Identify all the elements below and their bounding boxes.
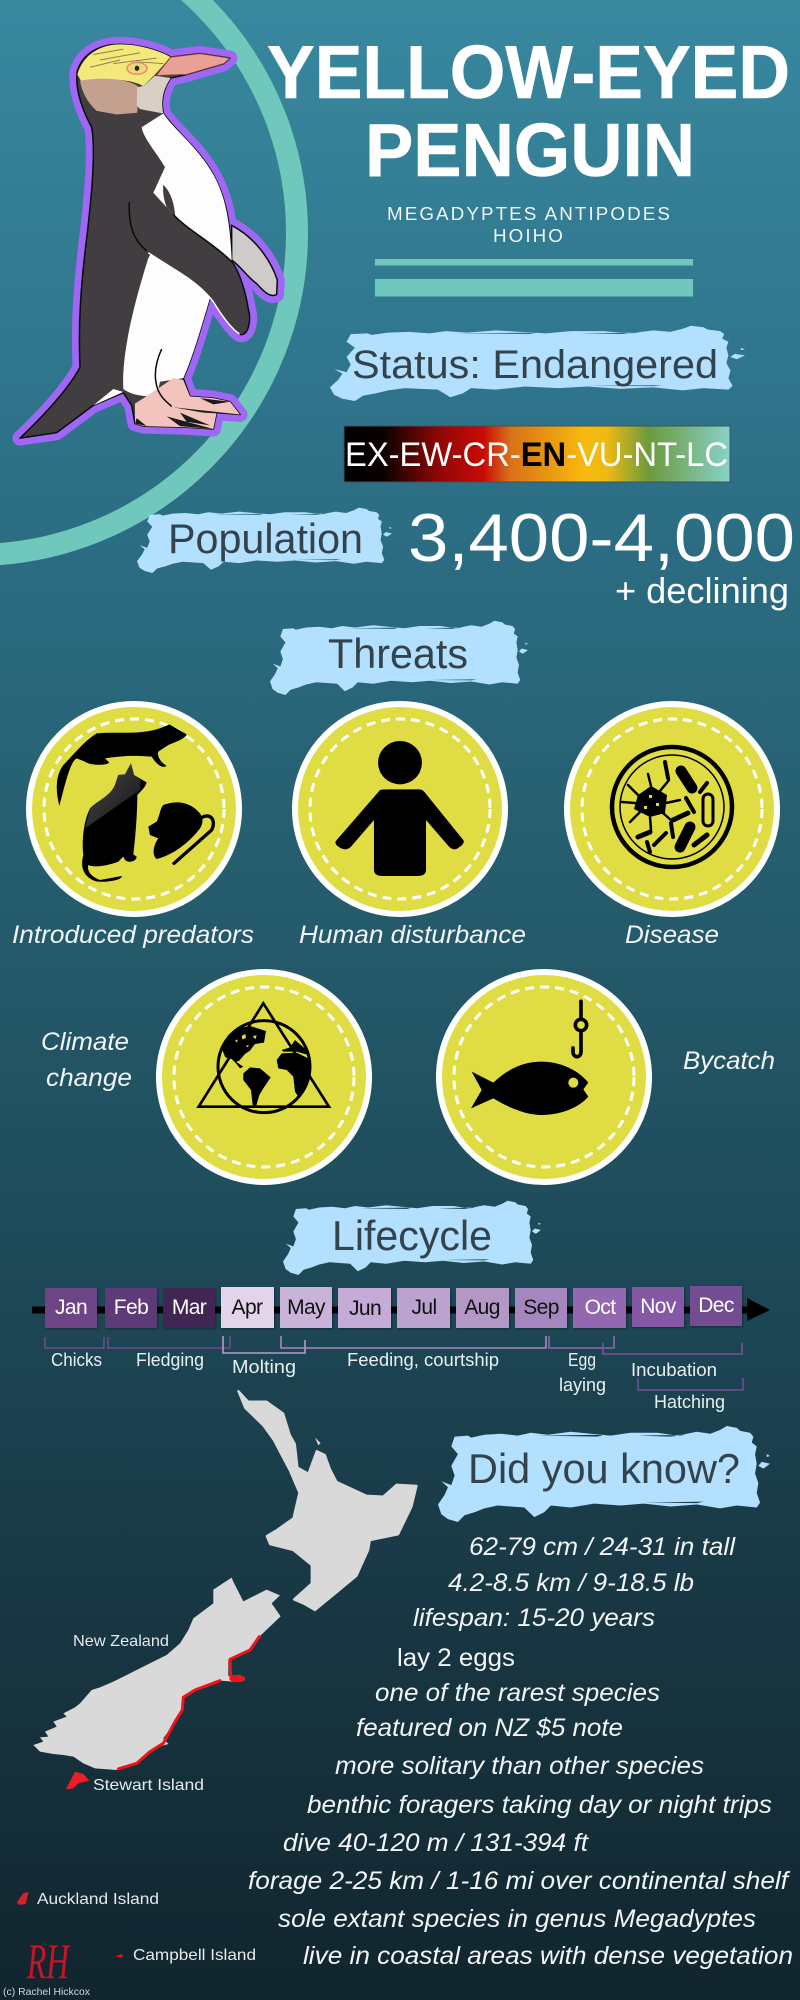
map labels: Auckland Island bbox=[37, 1891, 159, 1908]
population number: + declining bbox=[615, 570, 789, 611]
facts list: benthic foragers taking day or night trips bbox=[307, 1791, 772, 1819]
month boxes: Oct bbox=[585, 1296, 616, 1319]
threats heading: Threats bbox=[328, 630, 468, 677]
month boxes: Feb bbox=[114, 1296, 148, 1319]
month boxes: Jun bbox=[349, 1297, 381, 1320]
threat: bycatch bbox=[439, 972, 775, 1182]
lifecycle labels: Incubation bbox=[631, 1360, 717, 1380]
title divider bars bbox=[375, 259, 693, 296]
lifecycle labels: Fledging bbox=[136, 1350, 204, 1370]
did you know heading: Did you know? bbox=[468, 1445, 740, 1492]
lifecycle labels bbox=[51, 1350, 725, 1412]
population number: 3,400-4,000 bbox=[408, 500, 795, 576]
month boxes bbox=[45, 1286, 742, 1328]
lifecycle brackets bbox=[45, 1336, 743, 1390]
icon: petri dish bbox=[612, 747, 732, 867]
timeline arrow bbox=[32, 1298, 770, 1321]
facts list: one of the rarest species bbox=[375, 1679, 660, 1707]
month boxes: Jan bbox=[55, 1296, 87, 1319]
facts list bbox=[248, 1533, 793, 1970]
facts list: sole extant species in genus Megadyptes bbox=[278, 1905, 756, 1933]
subtitle: MEGADYPTES ANTIPODES bbox=[387, 204, 672, 224]
subtitle bbox=[387, 204, 672, 246]
lifecycle heading: Lifecycle bbox=[332, 1212, 492, 1259]
month boxes: Sep bbox=[523, 1296, 559, 1319]
facts list: featured on NZ $5 note bbox=[356, 1714, 623, 1742]
label bbox=[41, 1028, 132, 1092]
lifecycle labels: Hatching bbox=[654, 1392, 725, 1412]
month boxes: Dec bbox=[698, 1294, 734, 1317]
label: Bycatch bbox=[683, 1047, 775, 1075]
facts list: lay 2 eggs bbox=[397, 1644, 515, 1672]
population heading: Population bbox=[168, 515, 363, 562]
did you know heading bbox=[438, 1426, 770, 1522]
population heading bbox=[137, 508, 392, 573]
label: Climate bbox=[41, 1028, 129, 1056]
artist signature: (c) Rachel Hickcox bbox=[3, 1986, 91, 1998]
threat: introduced predators bbox=[12, 704, 254, 949]
penguin illustration bbox=[20, 44, 277, 438]
map labels: New Zealand bbox=[73, 1633, 169, 1650]
conservation status bar: EX-EW-CR-EN-VU-NT-LC bbox=[345, 436, 728, 474]
teal ring bbox=[0, 0, 297, 555]
icon: fish and hook bbox=[471, 1001, 588, 1115]
conservation status bar bbox=[344, 426, 730, 482]
label: Introduced predators bbox=[12, 921, 254, 949]
facts list: lifespan: 15-20 years bbox=[413, 1604, 655, 1632]
status heading: Status: Endangered bbox=[352, 343, 718, 387]
facts list: 62-79 cm / 24-31 in tall bbox=[469, 1533, 737, 1561]
month boxes: May bbox=[287, 1296, 326, 1319]
icon: person bbox=[335, 741, 464, 876]
title: PENGUIN bbox=[365, 108, 695, 192]
lifecycle labels: Chicks bbox=[51, 1350, 102, 1370]
threat: climate change bbox=[41, 972, 369, 1182]
lifecycle labels: Molting bbox=[232, 1357, 296, 1377]
lifecycle labels: Feeding, courtship bbox=[347, 1350, 499, 1370]
month boxes: Nov bbox=[640, 1295, 677, 1318]
lifecycle labels: Egg bbox=[568, 1350, 596, 1370]
title: YELLOW-EYED bbox=[267, 30, 790, 114]
label: Human disturbance bbox=[299, 921, 526, 949]
icon: globe in triangle bbox=[199, 1003, 329, 1113]
month boxes: Jul bbox=[411, 1296, 437, 1319]
map labels: Stewart Island bbox=[93, 1777, 204, 1794]
label: change bbox=[46, 1064, 132, 1092]
map labels: Campbell Island bbox=[133, 1947, 256, 1964]
subtitle: HOIHO bbox=[493, 226, 565, 246]
map of New Zealand bbox=[17, 1391, 417, 1964]
icon: mustelid, cat and rat bbox=[57, 724, 213, 882]
title bbox=[267, 30, 790, 192]
month boxes: Apr bbox=[232, 1296, 263, 1319]
month boxes: Mar bbox=[172, 1296, 207, 1319]
month boxes: Aug bbox=[464, 1296, 500, 1319]
facts list: live in coastal areas with dense vegetation bbox=[303, 1942, 793, 1970]
facts list: more solitary than other species bbox=[335, 1752, 704, 1780]
lifecycle labels: laying bbox=[559, 1375, 606, 1395]
threat: human disturbance bbox=[295, 704, 526, 949]
facts list: 4.2-8.5 km / 9-18.5 lb bbox=[448, 1569, 694, 1597]
artist signature bbox=[3, 1933, 91, 1998]
population number bbox=[408, 500, 795, 611]
lifecycle heading bbox=[283, 1201, 541, 1275]
artist signature: RH bbox=[26, 1933, 71, 1989]
threat: disease bbox=[567, 704, 777, 949]
facts list: forage 2-25 km / 1-16 mi over continental shelf bbox=[248, 1867, 791, 1895]
threats heading bbox=[270, 621, 528, 695]
status heading bbox=[330, 326, 745, 401]
label: Disease bbox=[625, 921, 719, 949]
map labels bbox=[37, 1633, 256, 1964]
facts list: dive 40-120 m / 131-394 ft bbox=[283, 1829, 589, 1857]
